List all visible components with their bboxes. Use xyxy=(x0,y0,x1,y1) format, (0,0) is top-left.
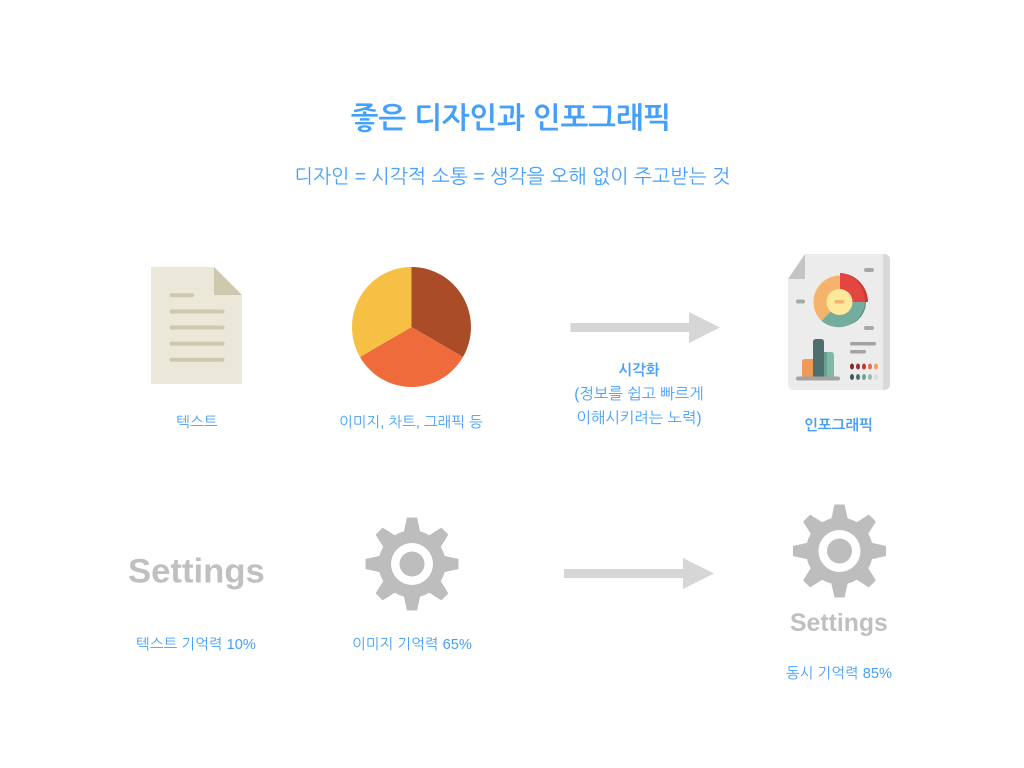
label: visualisation: (정보를 쉽고 빠르게 xyxy=(574,386,704,403)
title: 좋은 디자인과 인포그래픽 xyxy=(351,102,671,135)
icon: gear combined xyxy=(793,504,886,598)
icon: text document xyxy=(151,267,242,384)
subtitle: 디자인 = 시각적 소통 = 생각을 오해 없이 주고받는 것 xyxy=(295,166,730,188)
arrow: combined memory xyxy=(564,558,714,589)
label: image memory: 이미지 기억력 65% xyxy=(352,637,472,653)
label: text memory: 텍스트 기억력 10% xyxy=(136,637,256,653)
icon: gear image xyxy=(366,518,458,610)
arrow: visualisation xyxy=(570,312,720,343)
settings word: text only: Settings xyxy=(128,552,265,590)
label: combined memory: 동시 기억력 85% xyxy=(786,666,892,682)
label: infographic: 인포그래픽 xyxy=(804,418,873,434)
label: visualisation: 이해시키려는 노력) xyxy=(576,410,702,427)
label: text: 텍스트 xyxy=(176,415,218,431)
label: visualisation: 시각화 xyxy=(618,363,660,379)
settings word: combined: Settings xyxy=(790,610,888,637)
icon: infographic document xyxy=(788,254,890,390)
label: visualisation xyxy=(574,362,704,427)
pie chart xyxy=(352,267,471,387)
label: images: 이미지, 차트, 그래픽 등 xyxy=(339,415,483,431)
